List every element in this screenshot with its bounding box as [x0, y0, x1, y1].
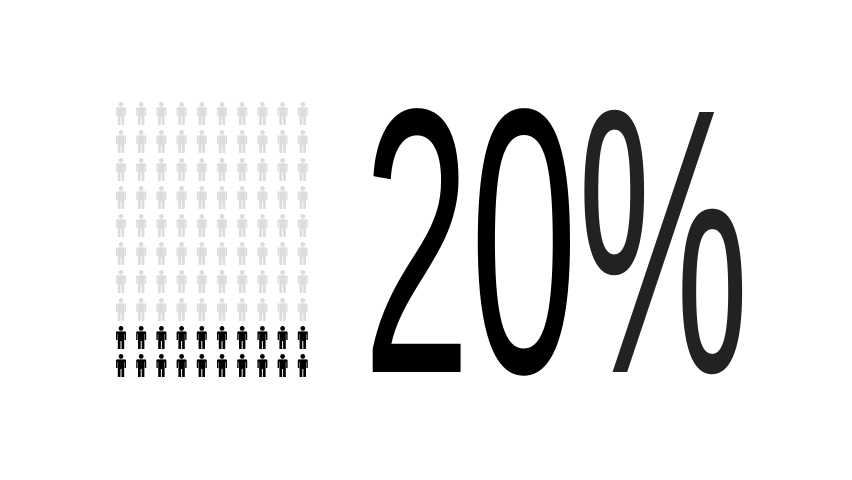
icon grid: people [116, 102, 308, 377]
grey people rows (80) [116, 102, 308, 321]
black people rows (20) [116, 326, 308, 377]
